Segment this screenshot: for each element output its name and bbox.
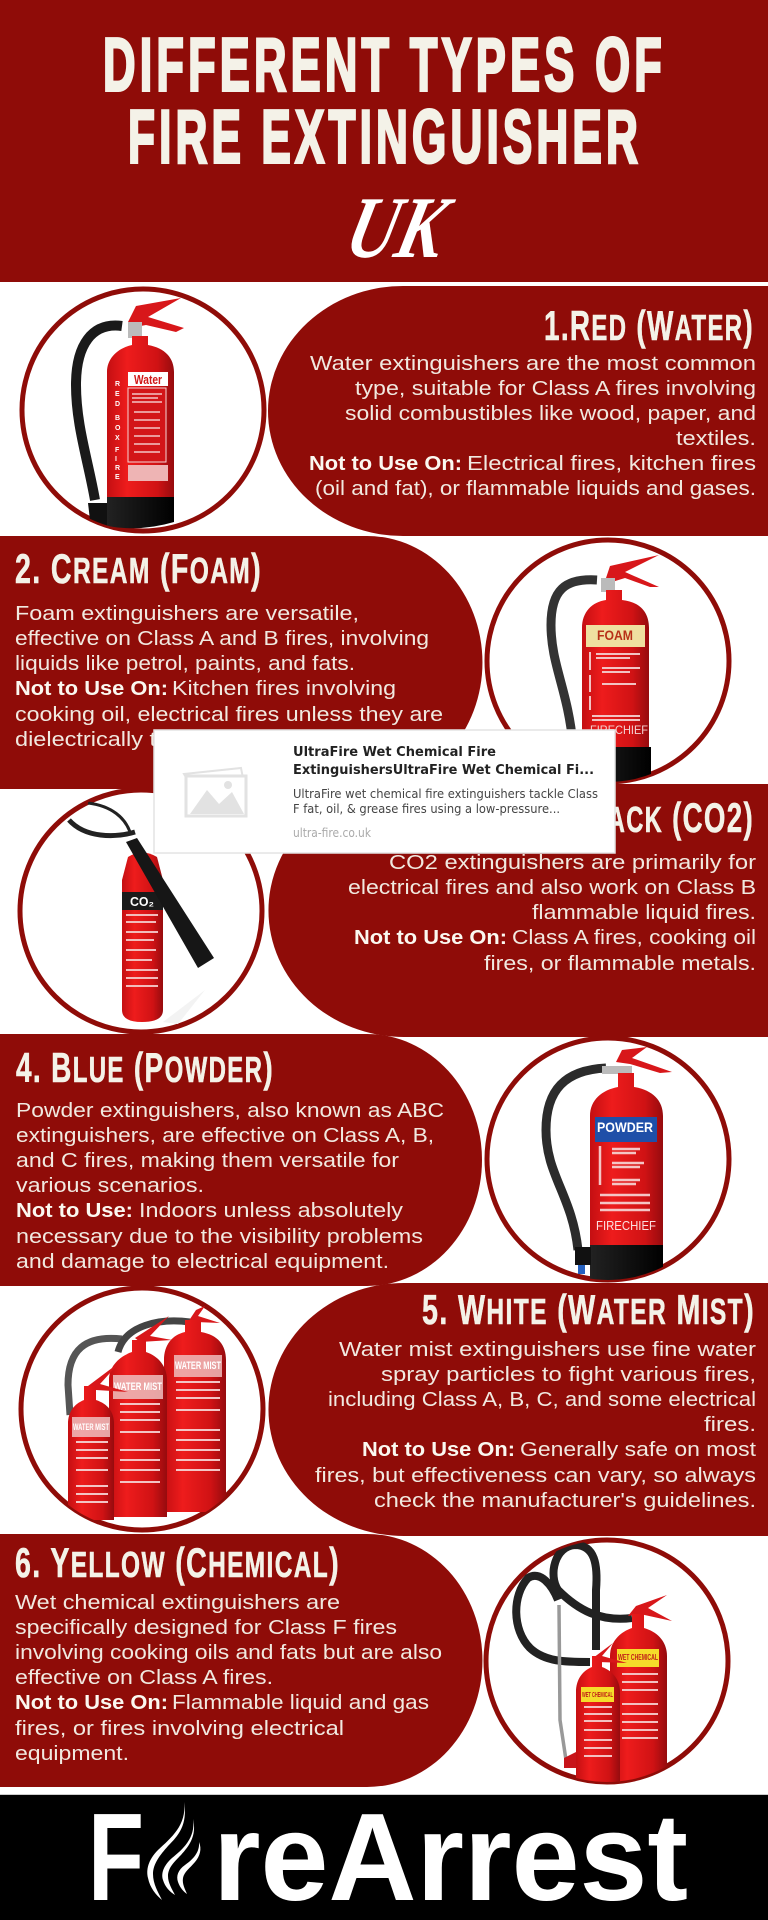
text block 1 <box>309 353 756 500</box>
text block 3: Not to Use On: <box>354 927 507 949</box>
popup domain: ultra-fire.co.uk <box>293 826 371 840</box>
popup description: F fat, oil, & grease fires using a low-pressure... <box>293 802 560 816</box>
photo circle 6: wet chemical extinguishers <box>486 1540 728 1790</box>
text block 5: check the manufacturer's guidelines. <box>374 1490 756 1512</box>
text block 5 <box>315 1339 757 1512</box>
text block 1: (oil and fat), or flammable liquids and gases. <box>315 478 756 500</box>
photo circle 2: foam extinguisher <box>487 540 729 790</box>
photo circle 5: three water mist extinguishers: WATER MIST <box>73 1422 109 1432</box>
text block 6: effective on Class A fires. <box>15 1667 273 1689</box>
text block 2: cooking oil, electrical fires unless they are <box>15 704 443 726</box>
photo circle 1: water extinguisher: Water <box>134 372 162 387</box>
photo circle 1: water extinguisher: E <box>115 391 120 398</box>
photo circle 1: water extinguisher: X <box>115 435 120 442</box>
text block 1: Electrical fires, kitchen fires <box>467 453 756 475</box>
heading 4: 4. Blue (Powder) <box>16 1036 274 1093</box>
text block 2: effective on Class A and B fires, involving <box>15 628 429 650</box>
text block 4: various scenarios. <box>16 1175 204 1197</box>
heading 6: 6. Yellow (Chemical) <box>15 1531 340 1588</box>
popup description: UltraFire wet chemical fire extinguishers tackle Class <box>293 787 598 801</box>
photo circle 1: water extinguisher: D <box>115 401 120 408</box>
heading 2: 2. Cream (Foam) <box>15 537 262 594</box>
photo circle 1: water extinguisher: O <box>115 425 121 432</box>
text block 4: and damage to electrical equipment. <box>16 1251 389 1273</box>
text block 5: Not to Use On: <box>362 1439 515 1461</box>
text block 1: Water extinguishers are the most common <box>310 353 756 375</box>
photo circle 1: water extinguisher: B <box>115 415 120 422</box>
photo circle 1: water extinguisher: R <box>115 465 120 472</box>
text block 6: Flammable liquid and gas <box>172 1692 429 1714</box>
text block 4: Not to Use: <box>16 1200 133 1222</box>
photo circle 1: water extinguisher: E <box>115 474 120 481</box>
link preview popup <box>154 730 615 853</box>
text block 4 <box>16 1100 444 1273</box>
photo circle 2: foam extinguisher: FOAM <box>597 627 633 643</box>
text block 5: Generally safe on most <box>520 1439 757 1461</box>
header banner <box>0 0 768 282</box>
photo circle 6: wet chemical extinguishers: WET CHEMICAL <box>582 1692 613 1699</box>
text block 2: Not to Use On: <box>15 678 168 700</box>
photo circle 1: water extinguisher: R <box>115 381 120 388</box>
icon: flame replacing the letter i <box>147 1802 200 1900</box>
photo circle 5: three water mist extinguishers <box>21 1288 263 1530</box>
text block 1: textiles. <box>676 428 756 450</box>
photo circle 3: CO2 extinguisher <box>20 790 262 1032</box>
panel 6: yellow chemical <box>0 1531 482 1787</box>
text block 2 <box>15 603 443 751</box>
text block 2: dielectrically tested. <box>15 729 220 751</box>
text block 5: Water mist extinguishers use fine water <box>339 1339 756 1361</box>
text block 3: fires, or flammable metals. <box>484 953 756 975</box>
text block 6 <box>15 1592 442 1765</box>
text block 5: fires, but effectiveness can vary, so always <box>315 1465 756 1487</box>
panel 4: blue powder <box>0 1034 482 1286</box>
text block 2: Foam extinguishers are versatile, <box>15 603 359 625</box>
text block 1: Not to Use On: <box>309 453 462 475</box>
text block 2: liquids like petrol, paints, and fats. <box>15 653 355 675</box>
title <box>103 22 666 178</box>
footer logo bar <box>0 1789 768 1920</box>
text block 6: equipment. <box>15 1743 129 1765</box>
text block 4: Powder extinguishers, also known as ABC <box>16 1100 444 1122</box>
photo circle 3: CO2 extinguisher: CO₂ <box>130 894 154 909</box>
popup title <box>293 744 594 778</box>
text block 6: Wet chemical extinguishers are <box>15 1592 340 1614</box>
icon: image placeholder <box>184 768 246 816</box>
text block 4: extinguishers, are effective on Class A, B, <box>16 1125 434 1147</box>
photo circle 1: water extinguisher: F <box>115 447 120 454</box>
text block 2: Kitchen fires involving <box>172 678 396 700</box>
text block 6: Not to Use On: <box>15 1692 168 1714</box>
photo circle 5: three water mist extinguishers: WATER MIST <box>114 1381 162 1393</box>
text block 6: fires, or fires involving electrical <box>15 1718 344 1740</box>
text block 3: CO2 extinguishers are primarily for <box>389 852 756 874</box>
text block 3: electrical fires and also work on Class B <box>348 877 756 899</box>
photo circle 4: powder extinguisher <box>487 1038 729 1290</box>
photo circle 6: wet chemical extinguishers: WET CHEMICAL <box>618 1653 658 1662</box>
popup description <box>293 787 598 816</box>
text block 3: Class A fires, cooking oil <box>512 927 756 949</box>
panel 5: white water mist <box>268 1278 768 1536</box>
text block 1: solid combustibles like wood, paper, and <box>345 403 756 425</box>
text block 6: involving cooking oils and fats but are also <box>15 1642 442 1664</box>
panel 2: cream foam <box>0 536 482 789</box>
heading 5: 5. White (Water Mist) <box>422 1278 755 1335</box>
text block 6: specifically designed for Class F fires <box>15 1617 397 1639</box>
photo circle 1: water extinguisher: I <box>115 456 117 463</box>
photo circle 2: foam extinguisher: FIRECHIEF <box>590 723 648 737</box>
panel 3: black CO2 <box>268 784 768 1037</box>
text block 4: Indoors unless absolutely <box>139 1200 403 1222</box>
text block 4: and C fires, making them versatile for <box>16 1150 399 1172</box>
panel 1: red water <box>268 286 768 536</box>
photo circle 4: powder extinguisher: FIRECHIEF <box>596 1218 656 1233</box>
script subtitle UK: UK <box>337 179 462 277</box>
text block 3 <box>348 852 756 975</box>
popup title: ExtinguishersUltraFire Wet Chemical Fi... <box>293 762 594 778</box>
photo circle 5: three water mist extinguishers: WATER MIST <box>175 1360 221 1372</box>
photo circle 4: powder extinguisher: POWDER <box>597 1119 653 1135</box>
text block 5: including Class A, B, C, and some electrical <box>328 1389 756 1411</box>
text block 4: necessary due to the visibility problems <box>16 1226 423 1248</box>
text block 5: spray particles to fight various fires, <box>381 1364 756 1386</box>
text block 5: fires. <box>704 1414 756 1436</box>
popup title: UltraFire Wet Chemical Fire <box>293 744 496 760</box>
photo circle 1: water extinguisher <box>22 289 264 531</box>
text block 1: type, suitable for Class A fires involving <box>355 378 756 400</box>
text block 3: flammable liquid fires. <box>532 902 756 924</box>
